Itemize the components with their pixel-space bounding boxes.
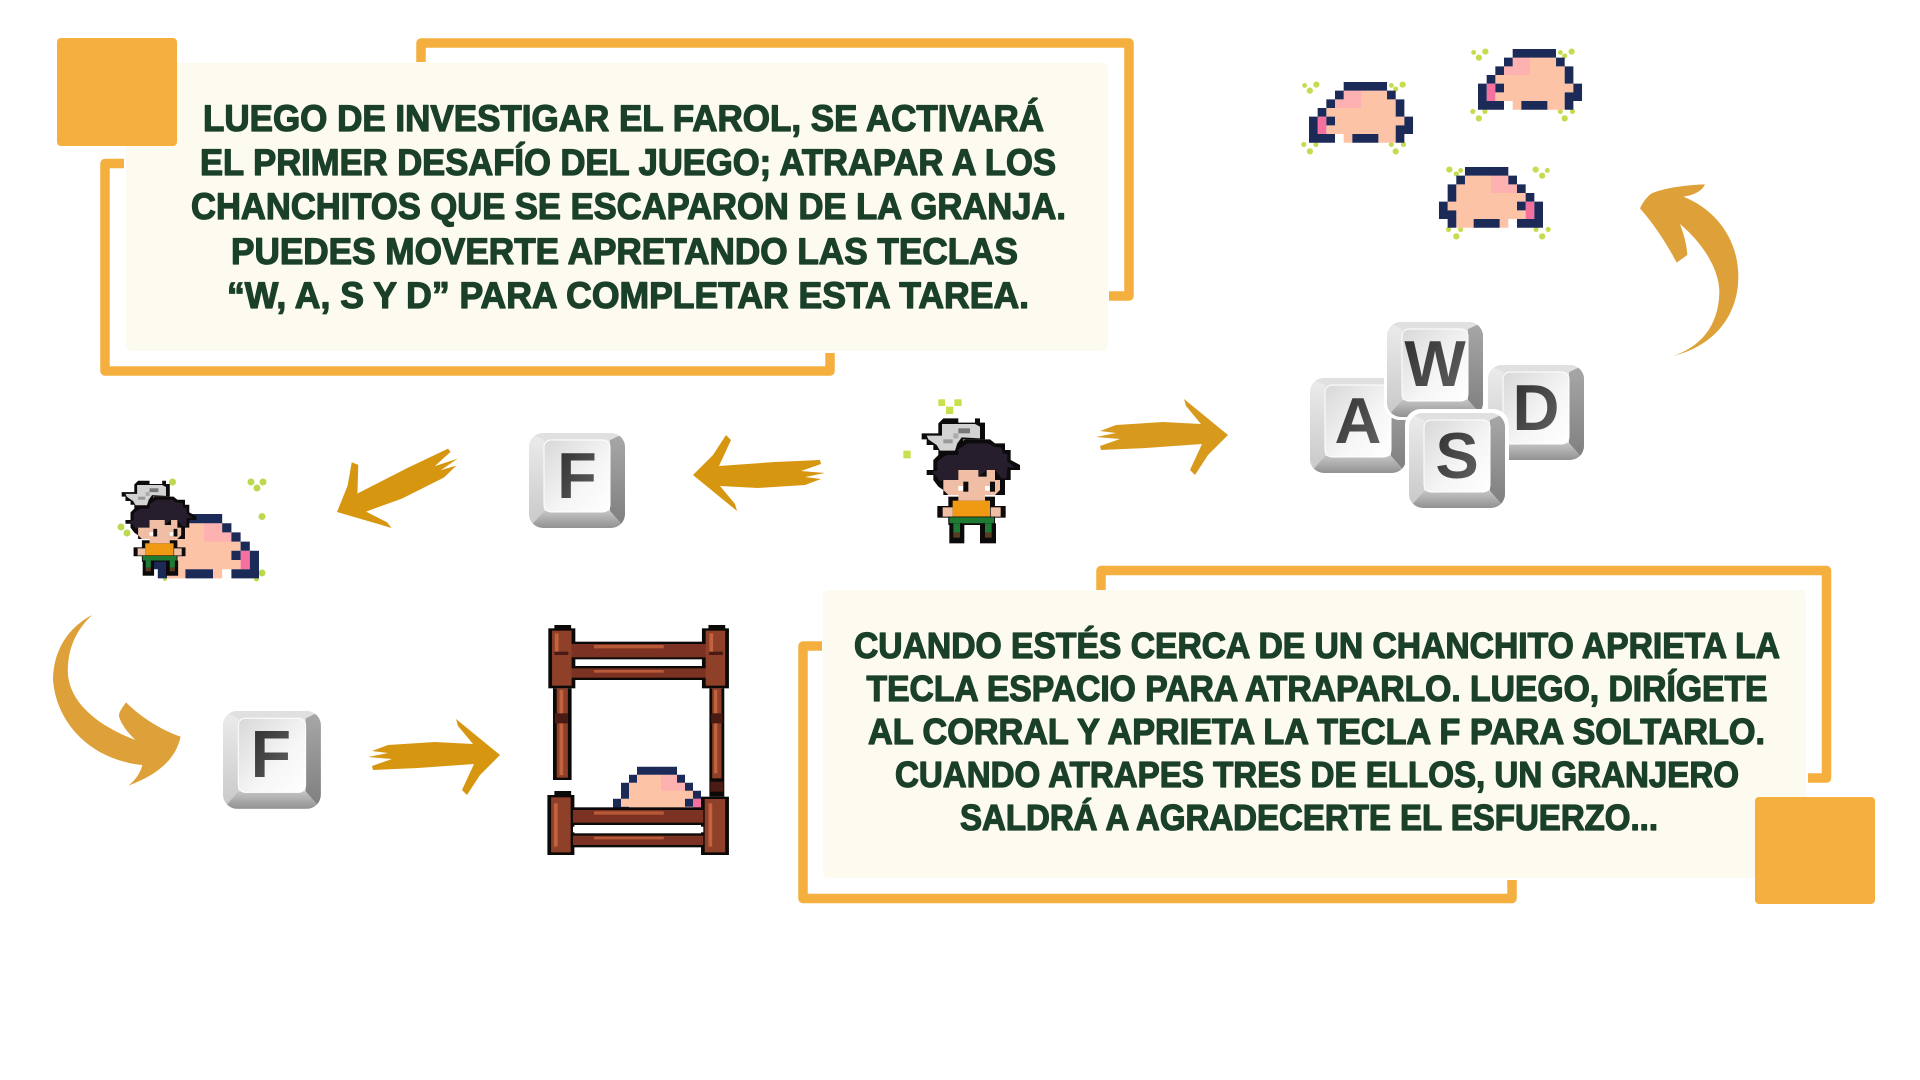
icon: pig left bbox=[1301, 81, 1413, 154]
arrow: character to WASD bbox=[1096, 399, 1228, 475]
icon: F key bottom: F bbox=[251, 718, 291, 792]
text block: top instructions: PUEDES MOVERTE APRETANDO LAS TECLAS bbox=[231, 230, 1018, 272]
text block: bottom instructions: TECLA ESPACIO PARA ATRAPARLO. LUEGO, DIRÍGETE bbox=[866, 668, 1768, 709]
text block: top instructions bbox=[191, 97, 1066, 316]
icon: pig top right bbox=[1470, 48, 1582, 121]
key W: W bbox=[1404, 327, 1466, 400]
key W bbox=[1384, 319, 1486, 420]
key S bbox=[1405, 409, 1509, 512]
text block: top instructions: EL PRIMER DESAFÍO DEL JUEGO; ATRAPAR A LOS bbox=[200, 141, 1056, 183]
icon: F key top: F bbox=[557, 439, 597, 512]
text block: bottom instructions bbox=[854, 625, 1780, 838]
key S: S bbox=[1435, 419, 1479, 492]
icon: corral with pig bbox=[547, 625, 729, 855]
icon: main character bbox=[903, 399, 1020, 543]
arrow: character to F key bbox=[693, 435, 825, 511]
arrow: curved up to pigs bbox=[1640, 184, 1738, 356]
key D: D bbox=[1513, 371, 1559, 444]
arrow: F key to caught pig bbox=[321, 424, 473, 545]
text block: bottom instructions: SALDRÁ A AGRADECERTE EL ESFUERZO... bbox=[960, 797, 1658, 838]
icon: F key top bbox=[529, 433, 625, 528]
text block: bottom instructions: AL CORRAL Y APRIETA LA TECLA F PARA SOLTARLO. bbox=[868, 711, 1765, 752]
key A: A bbox=[1335, 384, 1381, 457]
key D bbox=[1488, 365, 1584, 460]
icon: character carrying pig bbox=[118, 478, 266, 582]
text block: top instructions: CHANCHITOS QUE SE ESCAPARON DE LA GRANJA. bbox=[191, 185, 1066, 227]
icon: WASD keys bbox=[1310, 319, 1584, 512]
square accent top-left bbox=[57, 38, 177, 146]
text block: top instructions: LUEGO DE INVESTIGAR EL FAROL, SE ACTIVARÁ bbox=[203, 97, 1044, 139]
text block: bottom instructions: CUANDO ESTÉS CERCA DE UN CHANCHITO APRIETA LA bbox=[854, 625, 1780, 666]
arrow: F key to corral bbox=[368, 719, 500, 795]
icon: F key bottom bbox=[223, 711, 321, 809]
key A bbox=[1310, 378, 1406, 473]
square accent bottom-right bbox=[1755, 797, 1875, 904]
panel: bottom instructions bbox=[803, 570, 1875, 904]
panel: top instructions bbox=[57, 38, 1129, 371]
icon: pig centre bbox=[1439, 166, 1551, 239]
text block: bottom instructions: CUANDO ATRAPES TRES DE ELLOS, UN GRANJERO bbox=[895, 754, 1739, 795]
text block: top instructions: “W, A, S Y D” PARA COMPLETAR ESTA TAREA. bbox=[227, 274, 1029, 316]
arrow: curved down to F key bbox=[53, 615, 181, 786]
